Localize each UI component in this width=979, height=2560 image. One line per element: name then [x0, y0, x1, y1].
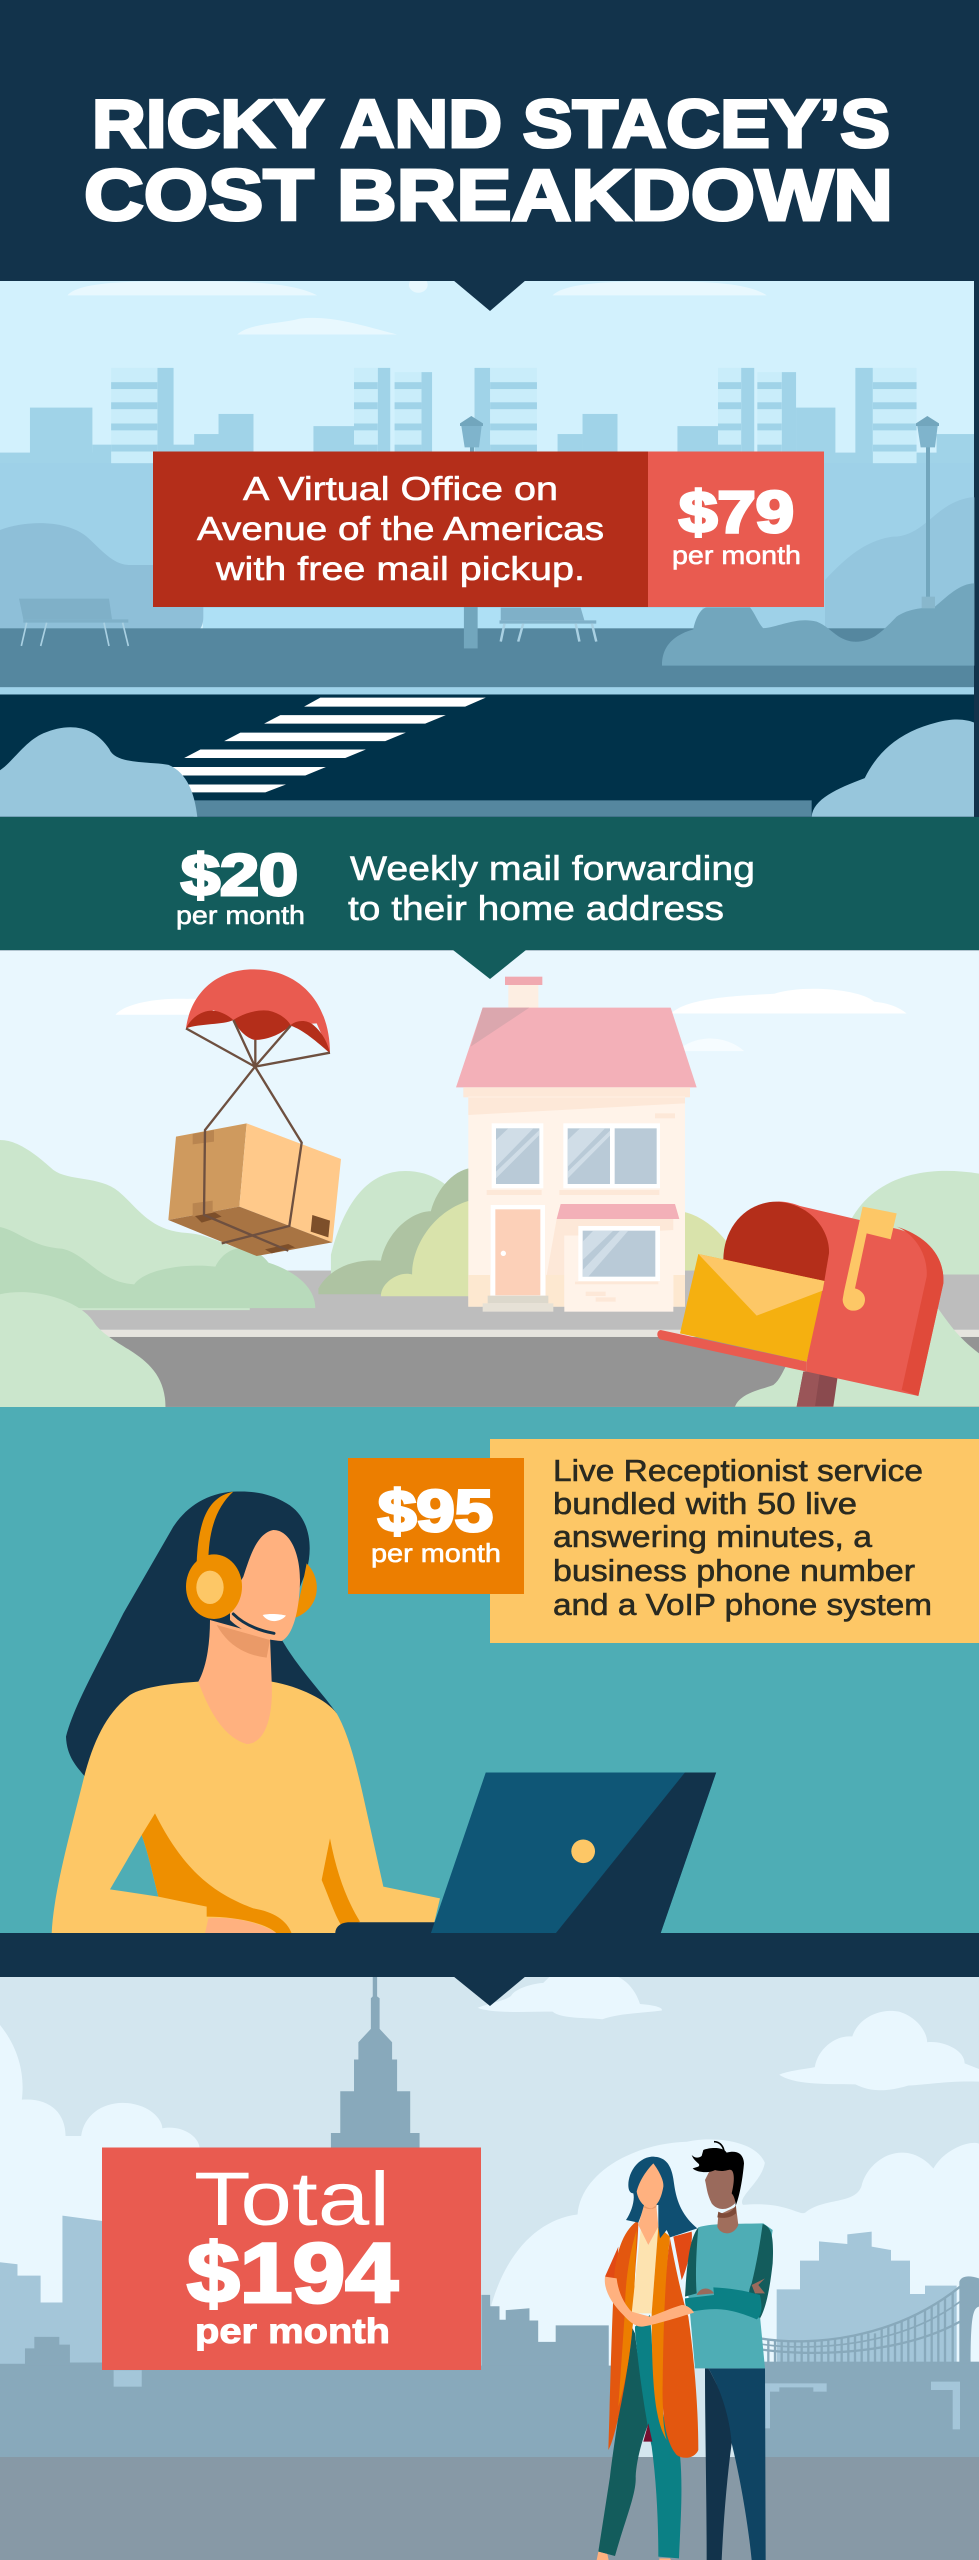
background hill right [825, 497, 974, 630]
title: RICKY AND STACEY’S [92, 86, 890, 162]
price: $95: $95 [378, 1479, 493, 1544]
panel: home scene [0, 950, 979, 1407]
door [491, 1205, 545, 1296]
arrow: title pointer [453, 280, 526, 311]
service details: bundled with 50 live [553, 1486, 857, 1521]
price: $20: $20 [181, 843, 298, 908]
clouds [0, 1977, 979, 2381]
icon: mailbox with envelope [657, 1202, 943, 1407]
price: $20 [176, 843, 305, 930]
mail forwarding description: Weekly mail forwarding [350, 850, 755, 888]
title band [0, 0, 979, 311]
woman [597, 2157, 698, 2560]
mail forwarding description: to their home address [348, 890, 724, 928]
callout: receptionist description [490, 1439, 979, 1643]
title [84, 86, 893, 236]
background hill left [0, 523, 203, 629]
icon: Empire State Building [331, 1977, 420, 2151]
lower window [578, 1226, 660, 1281]
service details: and a VoIP phone system [553, 1587, 932, 1622]
ground [0, 628, 974, 687]
house [456, 977, 697, 1312]
total label: Total [194, 2157, 390, 2242]
road bushes [0, 727, 197, 817]
right foreground bush [735, 1307, 979, 1407]
icon: receptionist with headset [52, 1491, 440, 1933]
office description [197, 470, 604, 587]
street [0, 2457, 979, 2560]
service details: answering minutes, a [553, 1519, 873, 1554]
price: $95: per month [371, 1538, 501, 1568]
sidewalk and road [0, 1271, 979, 1330]
callout: total [102, 2148, 481, 2370]
service details [553, 1453, 932, 1622]
left lamp [460, 412, 483, 455]
arrow: mail forwarding pointer [453, 950, 526, 979]
crosswalk [104, 698, 486, 792]
man [685, 2142, 773, 2560]
callout: virtual office [153, 452, 824, 607]
bushes behind house [331, 1171, 475, 1274]
road [0, 694, 974, 817]
price: $79: $79 [679, 480, 794, 545]
panel: divider band [0, 1933, 979, 1977]
office description: with free mail pickup. [215, 550, 585, 587]
bridge and right skyline [740, 2232, 979, 2458]
panel: city skyline scene [0, 1977, 979, 2560]
price: $95 [348, 1458, 524, 1594]
near skyline [0, 2295, 624, 2457]
building windows [111, 368, 917, 465]
service details: business phone number [553, 1553, 915, 1588]
upper windows [487, 1123, 660, 1195]
total price: $194 [187, 2226, 398, 2320]
mail forwarding description [348, 850, 755, 928]
price: $79 [672, 480, 801, 570]
right lamp [916, 412, 939, 608]
arrow: total pointer [453, 1976, 526, 2006]
clouds [67, 277, 767, 335]
service details: Live Receptionist service [553, 1453, 923, 1488]
office description: A Virtual Office on [243, 470, 558, 507]
price: $20: per month [176, 900, 305, 930]
office description: Avenue of the Americas [197, 510, 604, 547]
panel: receptionist scene [0, 1407, 979, 1933]
panel: office street scene [0, 265, 979, 826]
icon: couple [597, 2142, 773, 2560]
price: $79: per month [672, 540, 801, 570]
icon: park benches and lamps [19, 412, 939, 648]
title: COST BREAKDOWN [84, 156, 893, 236]
left bushes [0, 1140, 250, 1310]
icon: laptop [335, 1772, 716, 1933]
right bush [662, 583, 974, 666]
icon: parachute package [168, 969, 341, 1256]
far skyline [0, 2216, 102, 2381]
per month: per month [195, 2312, 390, 2351]
panel: mail forwarding band [0, 817, 979, 950]
clouds [116, 989, 907, 1051]
skyline buildings [0, 368, 974, 468]
